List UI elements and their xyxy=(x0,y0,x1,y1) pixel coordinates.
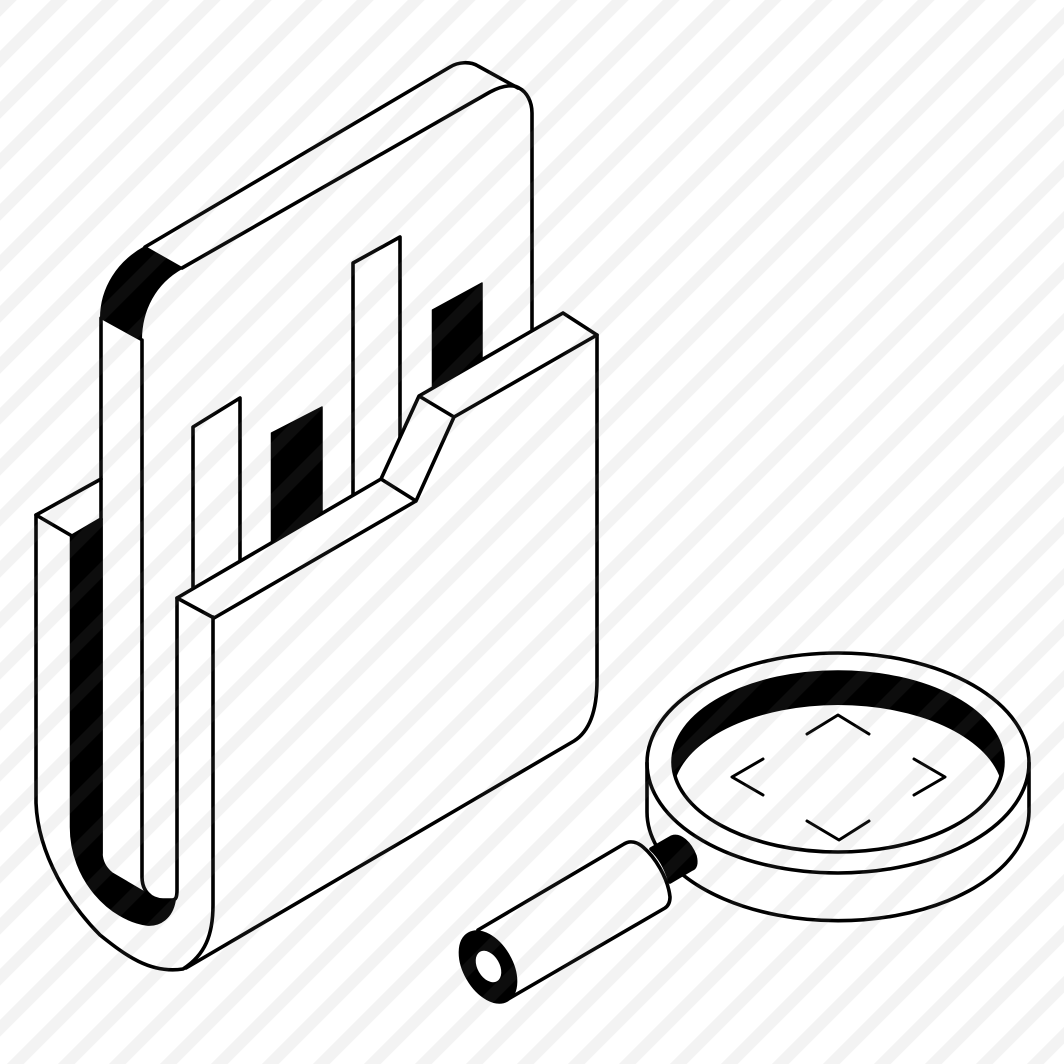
handle end hole xyxy=(470,946,507,987)
folder top lip xyxy=(177,313,597,618)
folder outer U curve xyxy=(36,515,213,970)
bar 1 xyxy=(193,398,240,588)
bar 3 xyxy=(353,237,400,495)
focus chevrons xyxy=(732,715,945,840)
lens inner ellipse xyxy=(673,672,1003,852)
bar 4 xyxy=(432,283,482,387)
handle end cap xyxy=(449,923,527,1011)
sheet left edge xyxy=(99,318,103,853)
lens rim side xyxy=(647,763,1029,921)
sheet top edge xyxy=(145,63,518,247)
magnifying glass xyxy=(449,653,1029,1011)
lens black crescent xyxy=(673,672,1003,778)
handle body xyxy=(478,842,670,998)
handle collar xyxy=(651,836,696,882)
sheet black corner xyxy=(101,247,182,340)
folder inner black band xyxy=(70,519,175,925)
folder inner U line xyxy=(142,340,177,900)
lens rim top xyxy=(647,653,1029,873)
folder back top edge xyxy=(36,479,101,536)
folder front panel xyxy=(186,335,597,968)
folder with chart sheet xyxy=(36,63,597,970)
sheet front outline xyxy=(182,86,532,330)
bar 2 xyxy=(272,407,322,543)
